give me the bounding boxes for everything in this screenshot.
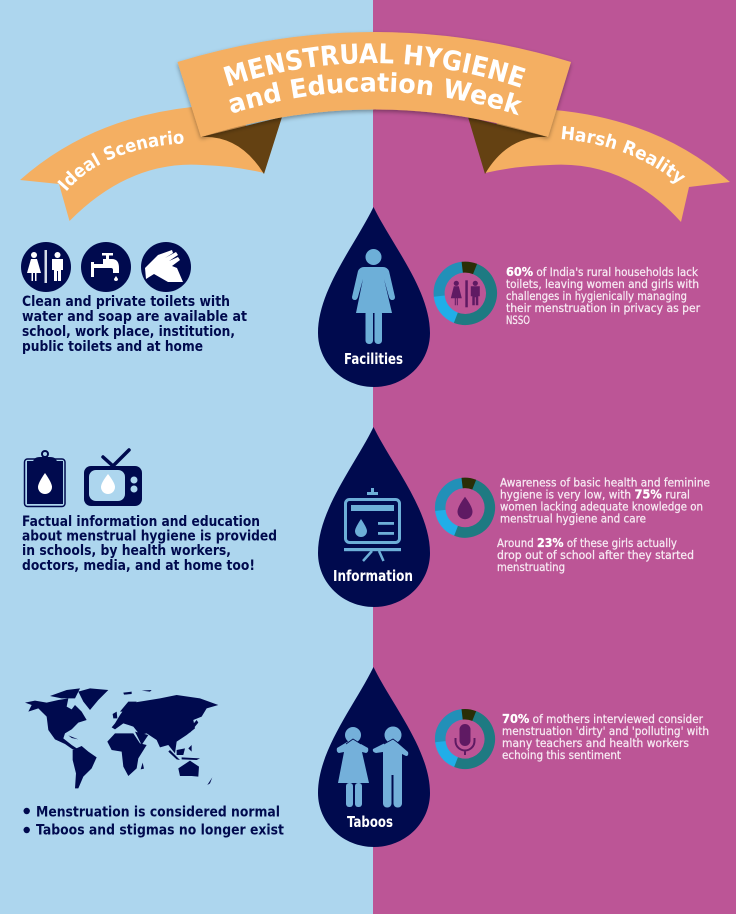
text: ideal facilities: school, work place, institution, [22, 324, 235, 340]
text: ideal information: in schools, by health workers, [22, 543, 231, 559]
text: ideal information: doctors, media, and at home too! [22, 558, 255, 574]
text: ideal facilities: public toilets and at home [22, 339, 203, 355]
text: facilities statistic [506, 264, 700, 327]
title line 2: and Education Week [229, 72, 522, 116]
icon: clipboard [24, 451, 65, 506]
text: information statistics: women lacking adequate knowledge on [500, 500, 703, 514]
drop: taboos [318, 667, 430, 847]
text: taboos statistic: 70% of mothers interviewed consider [502, 711, 703, 726]
text: taboos statistic: echoing this sentiment [502, 748, 621, 762]
title line 1: MENSTRUAL HYGIENE [224, 43, 526, 88]
ribbon fold: right [468, 117, 548, 174]
icon: toilet circle [21, 242, 71, 292]
text: information statistics: hygiene is very low, with 75% rural [500, 486, 690, 502]
icon: television [84, 450, 142, 506]
text: facilities statistic: 60% of India's rural households lack [506, 264, 698, 279]
ribbon: harsh reality [486, 110, 730, 222]
label: facilities: Facilities [344, 350, 403, 368]
icon: presentation board [344, 488, 401, 561]
title banner [176, 32, 572, 141]
text: facilities statistic: toilets, leaving women and girls with [506, 277, 699, 291]
icon: woman and man covering faces [337, 726, 408, 808]
text: information statistics: drop out of school after they started [497, 548, 694, 562]
ribbon label: ideal scenario: Ideal Scenario [57, 130, 184, 191]
panel: ideal scenario background [0, 0, 373, 914]
text: ideal facilities: water and soap are available at [22, 309, 247, 325]
text: information statistics: menstrual hygiene and care [500, 512, 646, 526]
text: information statistics: menstruating [497, 560, 565, 574]
text: ideal facilities [22, 294, 247, 355]
drop: facilities [318, 207, 430, 387]
world map [25, 688, 218, 788]
text: ideal taboos: Taboos and stigmas no longer exist [36, 822, 284, 838]
text: ideal facilities: Clean and private toilets with [22, 294, 230, 310]
ribbon label: harsh reality: Harsh Reality [562, 126, 686, 184]
text: ideal taboos: Menstruation is considered normal [36, 804, 280, 820]
icon: woman [352, 249, 395, 344]
text: facilities statistic: challenges in hygienically managing [506, 289, 687, 303]
text: ideal information: about menstrual hygiene is provided [22, 528, 277, 544]
text: information statistics [497, 476, 710, 574]
donut chart: information [433, 475, 497, 540]
ribbon: ideal scenario [20, 107, 264, 221]
panel: harsh reality background [373, 0, 736, 914]
ribbon fold: left [201, 117, 282, 174]
text: ideal information [22, 514, 277, 574]
label: information: Information [333, 567, 413, 585]
text: information statistics: Awareness of basic health and feminine [500, 476, 710, 490]
text: facilities statistic: NSSO [506, 313, 530, 327]
text: taboos statistic: many teachers and health workers [502, 736, 689, 750]
text: facilities statistic: their menstruation in privacy as per [506, 301, 700, 315]
text: ideal information: Factual information and education [22, 514, 260, 530]
drop: information [318, 427, 430, 607]
donut chart: taboos [433, 707, 497, 771]
icon: toilet symbols [451, 280, 480, 307]
text: information statistics: Around 23% of these girls actually [497, 535, 677, 550]
icon: tap circle [81, 242, 131, 292]
label: taboos: Taboos [347, 813, 393, 831]
icon: washing hands circle [141, 242, 191, 292]
text: taboos statistic [502, 711, 709, 762]
text: taboos statistic: menstruation 'dirty' and 'polluting' with [502, 724, 709, 738]
icon: purple drop [458, 497, 472, 519]
icon: microphone [456, 724, 474, 755]
text: ideal taboos [24, 804, 284, 838]
donut chart: facilities [431, 259, 499, 327]
